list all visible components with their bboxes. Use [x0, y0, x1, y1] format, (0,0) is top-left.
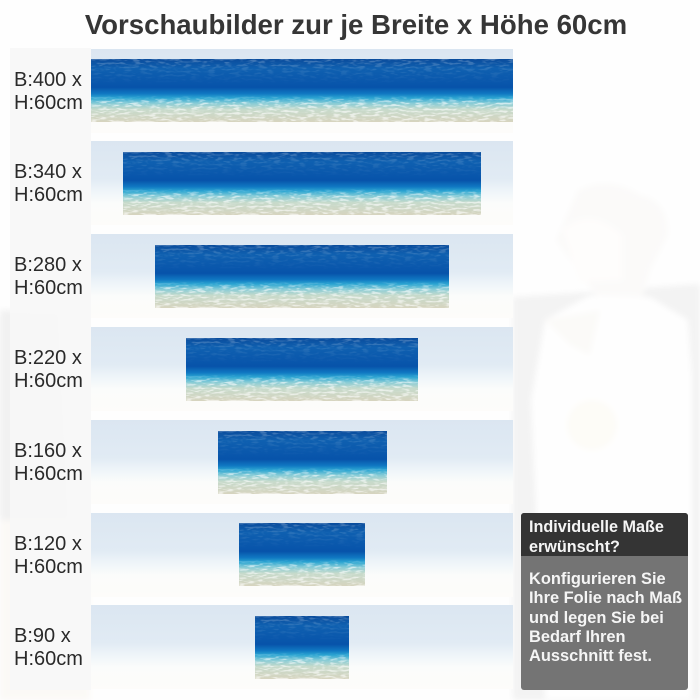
callout heading	[521, 513, 688, 556]
size label	[14, 625, 83, 670]
size label: B:220 x	[14, 347, 82, 369]
preview panel	[91, 234, 513, 318]
preview panel	[91, 141, 513, 225]
size label: H:60cm	[14, 556, 83, 578]
preview panel	[91, 420, 513, 504]
preview panel	[91, 513, 513, 597]
size label: H:60cm	[14, 370, 83, 392]
row: 340 x 60	[14, 141, 513, 215]
ocean preview image	[186, 338, 418, 401]
ocean preview image	[123, 152, 481, 215]
ocean preview image	[91, 59, 513, 122]
size label: H:60cm	[14, 277, 83, 299]
preview panel	[91, 605, 513, 689]
size label	[14, 69, 83, 114]
size label: H:60cm	[14, 92, 83, 114]
row: 280 x 60	[14, 234, 513, 308]
size label: B:160 x	[14, 440, 82, 462]
size label: H:60cm	[14, 184, 83, 206]
size label	[14, 161, 83, 206]
size label: B:120 x	[14, 533, 82, 555]
size label: B:400 x	[14, 69, 82, 91]
callout body text: Bedarf Ihren	[529, 628, 626, 646]
callout heading: erwünscht?	[529, 538, 620, 556]
callout heading: Individuelle Maße	[529, 518, 664, 536]
size label: H:60cm	[14, 648, 83, 670]
ocean preview image	[218, 431, 387, 494]
callout body text: Konfigurieren Sie	[529, 570, 666, 588]
size label: B:340 x	[14, 161, 82, 183]
callout body text: und legen Sie bei	[529, 609, 664, 627]
left label column	[10, 48, 91, 690]
preview panel	[91, 49, 513, 133]
callout: custom sizes	[521, 513, 688, 690]
ocean preview image	[255, 616, 349, 679]
size label: H:60cm	[14, 463, 83, 485]
callout body text: Ausschnitt fest.	[529, 647, 652, 665]
ocean preview image	[239, 523, 365, 586]
row: 400 x 60	[14, 49, 513, 122]
size label	[14, 347, 83, 392]
row: 120 x 60	[14, 513, 513, 586]
row: 160 x 60	[14, 420, 513, 494]
size label	[14, 254, 83, 299]
size label: B:90 x	[14, 625, 71, 647]
callout body text	[529, 570, 682, 665]
callout body text: Ihre Folie nach Maß	[529, 589, 682, 607]
row: 90 x 60	[14, 605, 513, 679]
title: Vorschaubilder zur je Breite x Höhe 60cm	[85, 9, 627, 40]
row: 220 x 60	[14, 327, 513, 401]
size label: B:280 x	[14, 254, 82, 276]
ocean preview image	[155, 245, 449, 308]
size label	[14, 533, 83, 578]
size label	[14, 440, 83, 485]
preview panel	[91, 327, 513, 411]
